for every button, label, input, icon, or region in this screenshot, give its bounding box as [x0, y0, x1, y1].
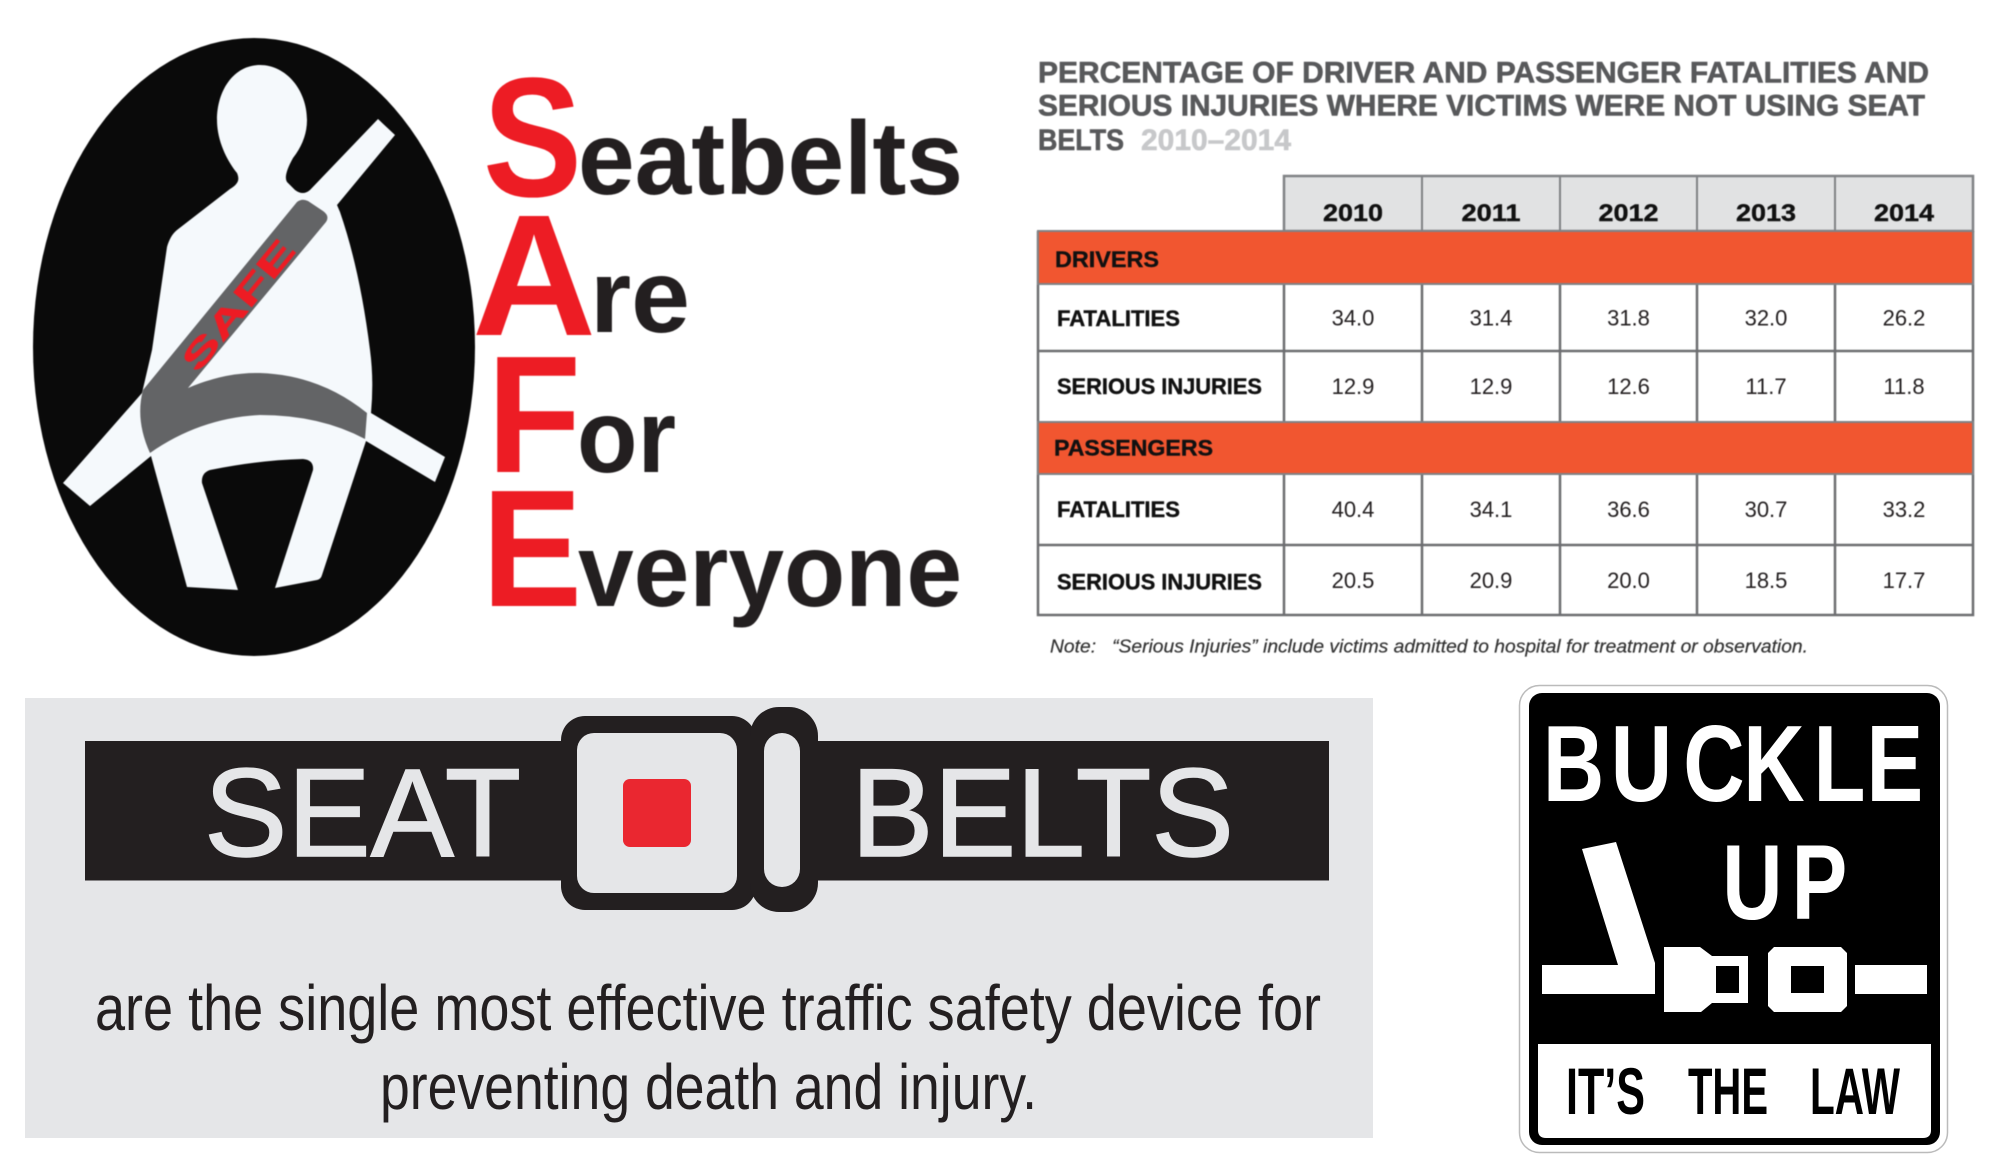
white law panel — [1538, 1044, 1931, 1138]
line: Everyone — [482, 456, 962, 642]
section: passengers — [1038, 422, 1973, 474]
row: driver serious injuries: SERIOUS INJURIES — [1057, 374, 1262, 399]
row: driver fatalities: FATALITIES — [1057, 306, 1180, 331]
heading: PERCENTAGE OF DRIVER AND PASSENGER FATALITIES AND — [1038, 56, 1929, 90]
sign text IT'S THE LAW — [1566, 1054, 1900, 1128]
section: drivers: DRIVERS — [1055, 247, 1159, 272]
line: For — [487, 322, 676, 508]
row: passenger serious injuries: 20.9 — [1470, 568, 1512, 593]
row: passenger serious injuries: 18.5 — [1745, 568, 1787, 593]
section: passengers: PASSENGERS — [1054, 436, 1213, 460]
row: driver serious injuries: 11.8 — [1883, 374, 1925, 399]
line: Are: A — [472, 178, 596, 372]
panel: buckle up road sign — [1520, 686, 1948, 1152]
sign text UP: UP — [1722, 823, 1847, 942]
table grid — [1038, 231, 1973, 615]
row: driver fatalities: 31.4 — [1470, 306, 1512, 330]
year header row: 2014 — [1874, 200, 1935, 227]
panel: SAFE seatbelt logo — [33, 38, 963, 656]
row: driver fatalities: 31.8 — [1607, 306, 1650, 330]
year header row: 2010 — [1323, 200, 1383, 227]
heading: 2010–2014 — [1141, 124, 1292, 157]
row: passenger fatalities: 30.7 — [1745, 497, 1787, 522]
heading: BELTS — [1038, 124, 1124, 157]
line: Seatbelts — [483, 43, 963, 233]
row: driver serious injuries — [1057, 374, 1925, 399]
row: passenger fatalities: FATALITIES — [1057, 497, 1180, 522]
line: For: or — [577, 379, 676, 495]
line: Everyone: E — [482, 456, 582, 642]
icon: seated figure wearing a seatbelt — [33, 38, 475, 656]
year header row: 2012 — [1598, 200, 1658, 227]
sign border — [1520, 686, 1948, 1152]
line: Are: re — [590, 239, 690, 355]
row: driver serious injuries: 12.9 — [1470, 374, 1512, 399]
sign face — [1529, 693, 1940, 1145]
icon: red buckle button — [623, 779, 691, 847]
tagline: preventing death and injury. — [380, 1051, 1037, 1123]
row: passenger serious injuries: 20.0 — [1607, 568, 1650, 593]
row: driver serious injuries: 12.9 — [1332, 374, 1374, 399]
row: passenger fatalities: 36.6 — [1607, 497, 1650, 522]
row: driver serious injuries: 12.6 — [1607, 374, 1650, 399]
heading: SERIOUS INJURIES WHERE VICTIMS WERE NOT USING SEAT — [1038, 90, 1925, 122]
year header row: 2013 — [1736, 200, 1796, 227]
row: driver fatalities: 32.0 — [1745, 306, 1787, 330]
line: For: F — [487, 322, 581, 508]
year header row — [1284, 176, 1973, 231]
row: passenger fatalities: 40.4 — [1332, 497, 1374, 522]
heading — [1038, 56, 1929, 157]
row: passenger fatalities: 34.1 — [1470, 497, 1512, 522]
line: Seatbelts: eatbelts — [578, 101, 963, 217]
sign text IT'S THE LAW: IT’S — [1566, 1054, 1645, 1128]
row: driver fatalities: 34.0 — [1332, 306, 1374, 330]
sign text IT'S THE LAW: THE — [1688, 1054, 1768, 1128]
icon: buckled belt — [1542, 842, 1927, 1012]
row: passenger fatalities: 33.2 — [1883, 497, 1925, 522]
panel: seat belts message — [25, 698, 1373, 1138]
figure silhouette with belt ends — [63, 65, 445, 590]
section: drivers — [1038, 231, 1973, 284]
line: Everyone: veryone — [578, 513, 962, 629]
belt label BELTS: BELTS — [851, 744, 1234, 883]
grey background — [25, 698, 1373, 1138]
slogan: Seatbelts Are For Everyone — [472, 43, 963, 642]
tagline: are the single most effective traffic safety device for — [95, 972, 1321, 1044]
sign text BUCKLE: BUCKLE — [1543, 703, 1923, 824]
sign text IT'S THE LAW: LAW — [1810, 1054, 1900, 1128]
belt band with buckle — [85, 707, 1329, 912]
row: passenger serious injuries: SERIOUS INJURIES — [1057, 570, 1262, 594]
line: Seatbelts: S — [483, 43, 582, 233]
row: passenger serious injuries — [1057, 568, 1925, 594]
row: passenger fatalities — [1057, 497, 1925, 522]
row: passenger serious injuries: 17.7 — [1883, 568, 1925, 593]
belt label SAFE: SAFE — [174, 232, 303, 379]
row: driver fatalities — [1057, 306, 1925, 331]
row: driver serious injuries: 11.7 — [1745, 374, 1787, 399]
black oval — [33, 38, 475, 656]
line: Are — [472, 178, 690, 372]
grey belt — [140, 200, 367, 453]
belt label SEAT: SEAT — [204, 744, 521, 883]
tagline — [95, 972, 1321, 1123]
panel: fatalities and injuries table — [1038, 56, 1973, 656]
row: driver fatalities: 26.2 — [1883, 306, 1925, 330]
year header row: 2011 — [1462, 200, 1520, 227]
table footnote: Note: “Serious Injuries” include victims admitted to hospital for treatment or observation. — [1050, 636, 1808, 656]
row: passenger serious injuries: 20.5 — [1332, 568, 1374, 593]
